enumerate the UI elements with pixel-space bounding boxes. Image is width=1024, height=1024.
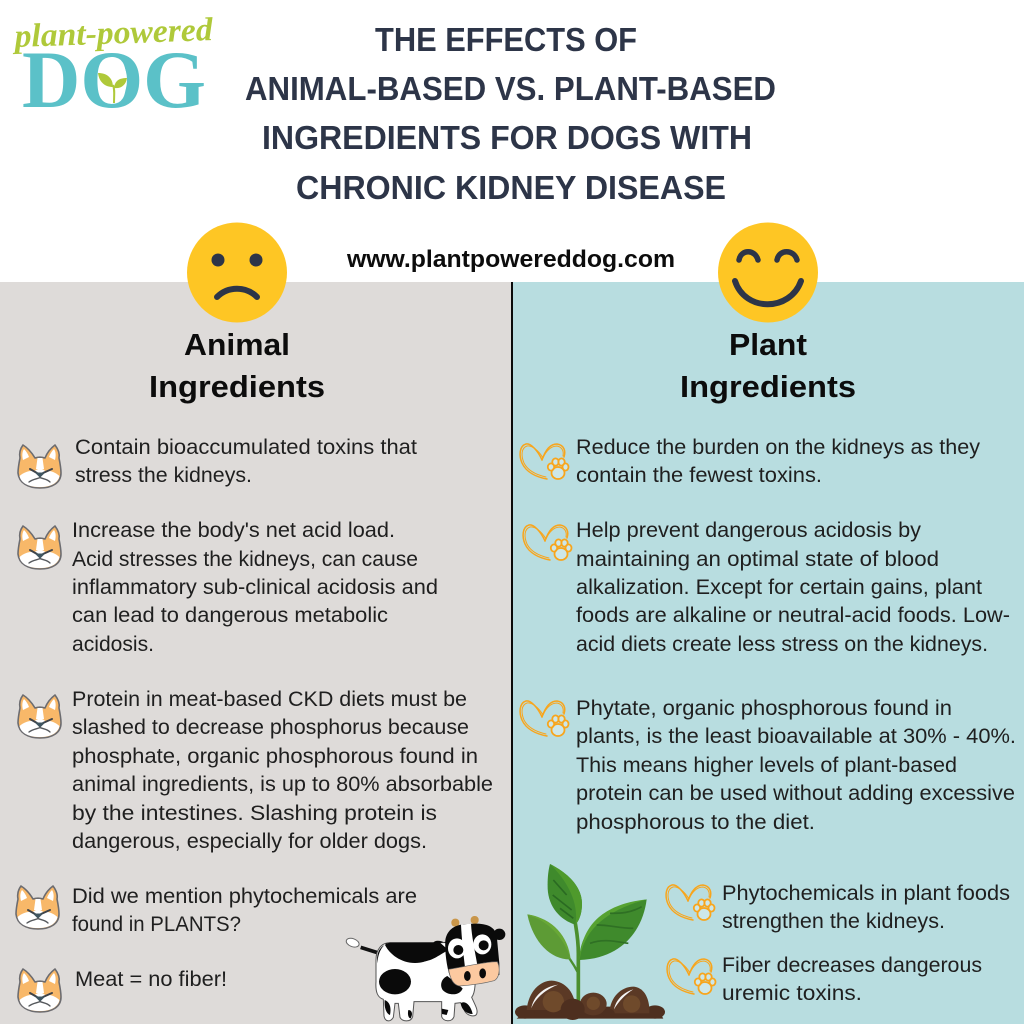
text: phytochemicals	[72, 885, 417, 936]
icon: paw heart 5	[667, 959, 716, 994]
website url: www.plantpowereddog.com	[346, 246, 675, 273]
logo: plant-powered dog: plant-powered	[11, 12, 214, 55]
text: phytochemicals strengthen: strengthen the kidneys.	[722, 910, 945, 933]
text: phytate	[576, 697, 1016, 834]
illustration: seedling in soil	[515, 864, 665, 1020]
text: net acid load	[72, 519, 438, 656]
text: phytate: This means higher levels of plant-based	[576, 754, 957, 777]
text: phytate: plants, is the least bioavailable at 30% - 40%.	[576, 725, 1016, 748]
icon: paw heart 2	[523, 525, 572, 560]
illustration: cow	[345, 916, 505, 1021]
icon: paw heart 4	[666, 885, 714, 920]
text: reduce the burden	[576, 436, 981, 487]
text: net acid load: inflammatory sub-clinical acidosis and	[72, 576, 438, 599]
icon: sad face	[187, 222, 287, 322]
text: phytate: protein can be used without adding excessive	[576, 782, 1015, 805]
text: fiber decreases toxins: uremic toxins.	[722, 982, 862, 1005]
text: prevent acidosis: foods are alkaline or neutral-acid foods. Low-	[576, 604, 1010, 627]
text: prevent acidosis: alkalization. Except for certain gains, plant	[576, 576, 982, 599]
text: fiber decreases toxins	[722, 954, 982, 1005]
panel: plant ingredients background	[513, 282, 1024, 1024]
text: net acid load: Acid stresses the kidneys, can cause	[72, 548, 418, 571]
heading: animal ingredients	[149, 328, 325, 404]
text: protein and phosphorus: by the intestines. Slashing protein is	[72, 802, 437, 825]
icon: grumpy dog 1	[18, 445, 61, 488]
title: CHRONIC KIDNEY DISEASE	[296, 170, 726, 207]
icon: paw heart 1	[520, 444, 568, 479]
text: phytate: phosphorous to the diet.	[576, 811, 815, 834]
logo: plant-powered dog: DOG	[22, 34, 206, 125]
text: bioaccumulated toxins	[75, 436, 417, 487]
text: protein and phosphorus: phosphate, organic phosphorous found in	[72, 745, 478, 768]
text: reduce the burden: contain the fewest toxins.	[576, 464, 822, 487]
text: prevent acidosis	[576, 519, 1010, 656]
icon: grumpy dog 3	[18, 695, 61, 738]
text: reduce the burden: Reduce the burden on the kidneys as they	[576, 436, 981, 459]
heading: animal ingredients: Animal	[184, 328, 290, 362]
text: no fiber: Meat = no fiber!	[75, 968, 227, 991]
text: phytochemicals: Did we mention phytochemicals are	[72, 885, 417, 908]
panel: animal ingredients background	[0, 282, 511, 1024]
title: INGREDIENTS FOR DOGS WITH	[262, 120, 752, 157]
text: protein and phosphorus: Protein in meat-based CKD diets must be	[72, 688, 467, 711]
text: prevent acidosis: maintaining an optimal state of blood	[576, 548, 939, 571]
text: phytate: Phytate, organic phosphorous found in	[576, 697, 952, 720]
heading: plant ingredients: Plant	[729, 328, 807, 362]
text: net acid load: can lead to dangerous metabolic	[72, 604, 388, 627]
text: protein and phosphorus	[72, 688, 493, 853]
text: protein and phosphorus: animal ingredients, is up to 80% absorbable	[72, 773, 493, 796]
title	[245, 22, 776, 207]
center divider	[511, 282, 513, 1024]
text: phytochemicals strengthen	[722, 882, 1010, 933]
text: phytochemicals strengthen: Phytochemicals in plant foods	[722, 882, 1010, 905]
icon: grumpy dog 2	[18, 526, 61, 569]
heading: animal ingredients: Ingredients	[149, 370, 325, 404]
text: prevent acidosis: Help prevent dangerous acidosis by	[576, 519, 922, 542]
text: net acid load: Increase the body's net acid load.	[72, 519, 395, 542]
text: net acid load: acidosis.	[72, 633, 154, 656]
icon: grumpy dog 4	[16, 886, 59, 929]
text: bioaccumulated toxins: Contain bioaccumulated toxins that	[75, 436, 417, 459]
heading: plant ingredients: Ingredients	[680, 370, 856, 404]
icon: grumpy dog 5	[18, 969, 61, 1012]
text: bioaccumulated toxins: stress the kidneys.	[75, 464, 252, 487]
text: protein and phosphorus: slashed to decrease phosphorus because	[72, 716, 469, 739]
text: protein and phosphorus: dangerous, especially for older dogs.	[72, 830, 427, 853]
text: phytochemicals: found in PLANTS?	[72, 913, 241, 936]
icon: paw heart 3	[520, 701, 568, 736]
title: THE EFFECTS OF	[375, 22, 637, 59]
heading: plant ingredients	[680, 328, 856, 404]
title: ANIMAL-BASED VS. PLANT-BASED	[245, 71, 776, 108]
text: prevent acidosis: acid diets create less stress on the kidneys.	[576, 633, 988, 656]
icon: happy face	[718, 222, 818, 322]
text: fiber decreases toxins: Fiber decreases dangerous	[722, 954, 982, 977]
